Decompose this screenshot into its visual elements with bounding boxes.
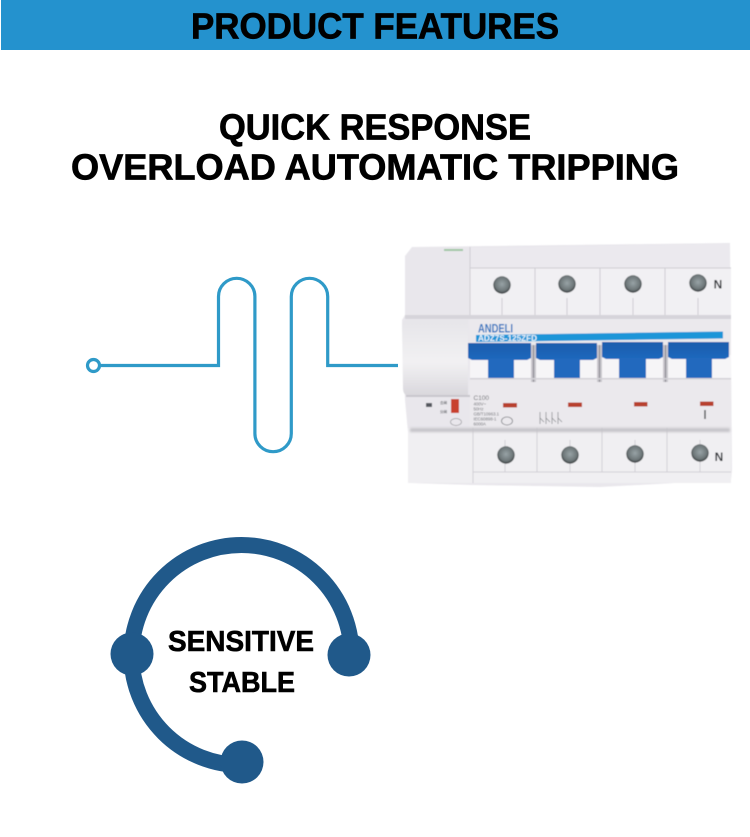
icon: bimetal wire trace [88, 278, 398, 452]
central band [470, 319, 731, 428]
rating text [474, 395, 500, 426]
blue rocker tops [468, 342, 729, 360]
off label: 分闸 [440, 409, 448, 414]
cover shadow [406, 395, 470, 397]
model number: ADZ7S-125ZFD [478, 334, 537, 343]
brand name: ANDELI [478, 324, 513, 336]
ring node right [328, 634, 370, 676]
upper screws [493, 274, 707, 294]
control labels [440, 400, 448, 414]
toggle base shadow [470, 378, 731, 380]
breaker body [402, 243, 732, 487]
badge line 1: SENSITIVE [168, 626, 314, 658]
ring node bottom [220, 740, 264, 784]
main heading [71, 106, 679, 188]
CCC mark [502, 417, 512, 425]
rating standard 2: IEC60898-1 [474, 416, 497, 422]
label: N bottom: N [715, 450, 723, 464]
pole separators [534, 345, 666, 382]
upper terminal band [470, 268, 731, 316]
upper cell dividers [470, 247, 731, 315]
ring arc [131, 545, 352, 765]
toggle background [470, 355, 731, 379]
red indicators [503, 402, 714, 408]
rating standard 1: GB/T10963.1 [474, 412, 500, 416]
model stripe [476, 332, 723, 342]
seam shadow [405, 315, 731, 319]
certification oval [450, 418, 462, 426]
rating capacity: 6000A [474, 422, 486, 426]
rating voltage: 400V~ [474, 402, 487, 406]
header banner [1, 0, 750, 50]
left control panel [426, 399, 462, 426]
rating C100: C100 [474, 395, 489, 402]
label: N top: N [714, 278, 722, 292]
circuit diagram [540, 412, 562, 424]
green status mark [444, 249, 463, 251]
left cover [402, 320, 468, 396]
header title: PRODUCT FEATURES [191, 5, 559, 46]
top edge band [470, 244, 730, 268]
lower band [408, 428, 731, 483]
badge: sensitive, stable [110, 545, 370, 784]
on off mark [704, 410, 706, 419]
test window [426, 403, 432, 407]
wire start terminal [88, 360, 100, 372]
on label: 合闸 [440, 400, 448, 405]
blue toggles [488, 358, 712, 378]
badge text [168, 626, 314, 699]
lower screws [497, 444, 709, 464]
heading line 2: OVERLOAD AUTOMATIC TRIPPING [71, 146, 679, 188]
shadow under central band [410, 428, 730, 432]
lower cell dividers [473, 428, 731, 483]
rating frequency: 50Hz [474, 406, 484, 412]
product photo: circuit breaker [402, 243, 732, 487]
red test switch [451, 399, 459, 413]
wire path [100, 278, 398, 452]
pole separator centres [534, 345, 666, 382]
ring node left [110, 632, 154, 676]
heading line 1: QUICK RESPONSE [219, 106, 531, 148]
badge line 2: STABLE [189, 667, 295, 699]
